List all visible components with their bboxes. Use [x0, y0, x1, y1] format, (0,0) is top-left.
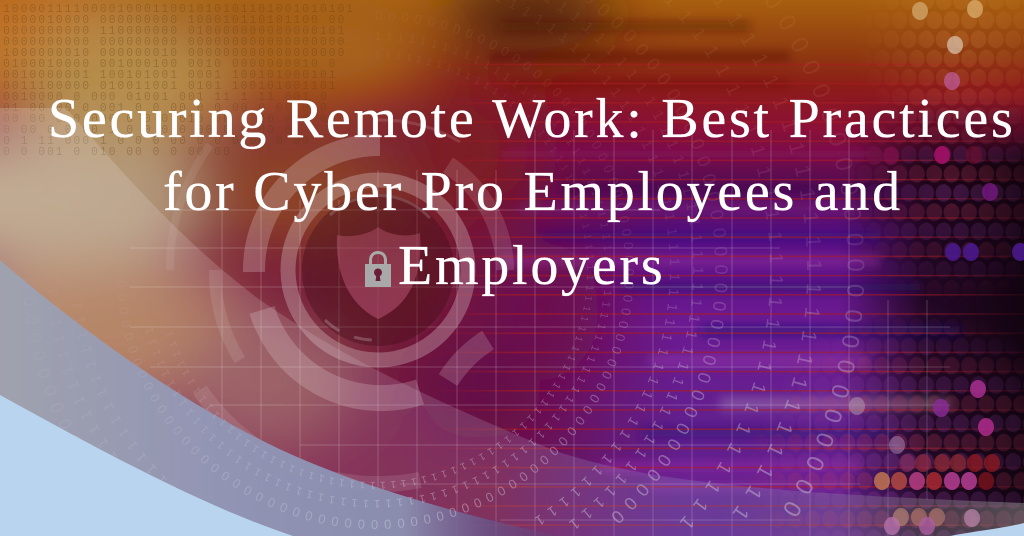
top binary rows [3, 3, 355, 159]
top binary rows: 0000000000 110000000 010000000000000101 [3, 25, 346, 38]
curved binary digits: 11111111111111111111111111111111111111111111111111111111111111111111111111111111111111111111 [166, 52, 594, 489]
title: for Cyber Pro Employees and [163, 161, 903, 223]
security rings and shield [170, 120, 505, 484]
top binary rows: 0 00 0 0 00 1 0 0 0 0 00 0 0 00 0 [3, 124, 293, 137]
light blue corner right [950, 523, 1024, 536]
grid lines [130, 130, 950, 536]
light blue corner left [0, 395, 293, 536]
top binary rows: 0000010000 000000000 100010110101100 00 [3, 14, 346, 27]
horizontal light streaks [490, 22, 960, 490]
top binary rows: 1000000010 000000010 000000000000000000 [3, 47, 346, 60]
gray swoosh band [0, 260, 560, 536]
top binary rows: 1000011110000100011001010101101001010101 [3, 3, 355, 16]
translucent veil swoosh [0, 108, 1024, 536]
top binary rows: 0010000001 100101001 0001 100101000101 [3, 69, 337, 82]
curved binary digits: 11111111111111111111111111111111111111111111111111111111111111111111111111111111111111111111 [146, 32, 612, 508]
top binary rows: 0100010000 001000100 0010 0000000010 0 [3, 58, 337, 71]
top binary rows: 0 1 11 000 1 0 0 0 00 0 0 0 00 0 00 [3, 135, 311, 148]
top binary rows: 0000000000 000000000 000000000000000000 [3, 36, 346, 49]
red scan lines [430, 60, 1024, 536]
top binary rows: 01 00 00 0 001 0 0 00 0 0 00 0 00 0 0 [3, 102, 329, 115]
top binary rows: 0 0 001 0 010 00 0 0 00 00 [3, 146, 232, 159]
top binary rows: 0010000 0 000 01001 001 11 1 11 001 0 [3, 91, 329, 104]
title: Securing Remote Work: Best Practices [48, 88, 1016, 150]
dot matrix [770, 0, 1024, 536]
curved binary digits: 1111111111111111111 [96, 424, 117, 457]
top binary rows: 00 00 0 0 000 0 0 0 010 00 0 00 0 0 00 [3, 113, 337, 126]
top binary rows: 0011100000 010011001 0101 100101001101 [3, 80, 337, 93]
icon: padlock [365, 251, 391, 287]
title: Employers [398, 235, 665, 297]
curved binary digits: 1111111111111111111 [75, 317, 175, 487]
icon: shield [337, 227, 420, 319]
